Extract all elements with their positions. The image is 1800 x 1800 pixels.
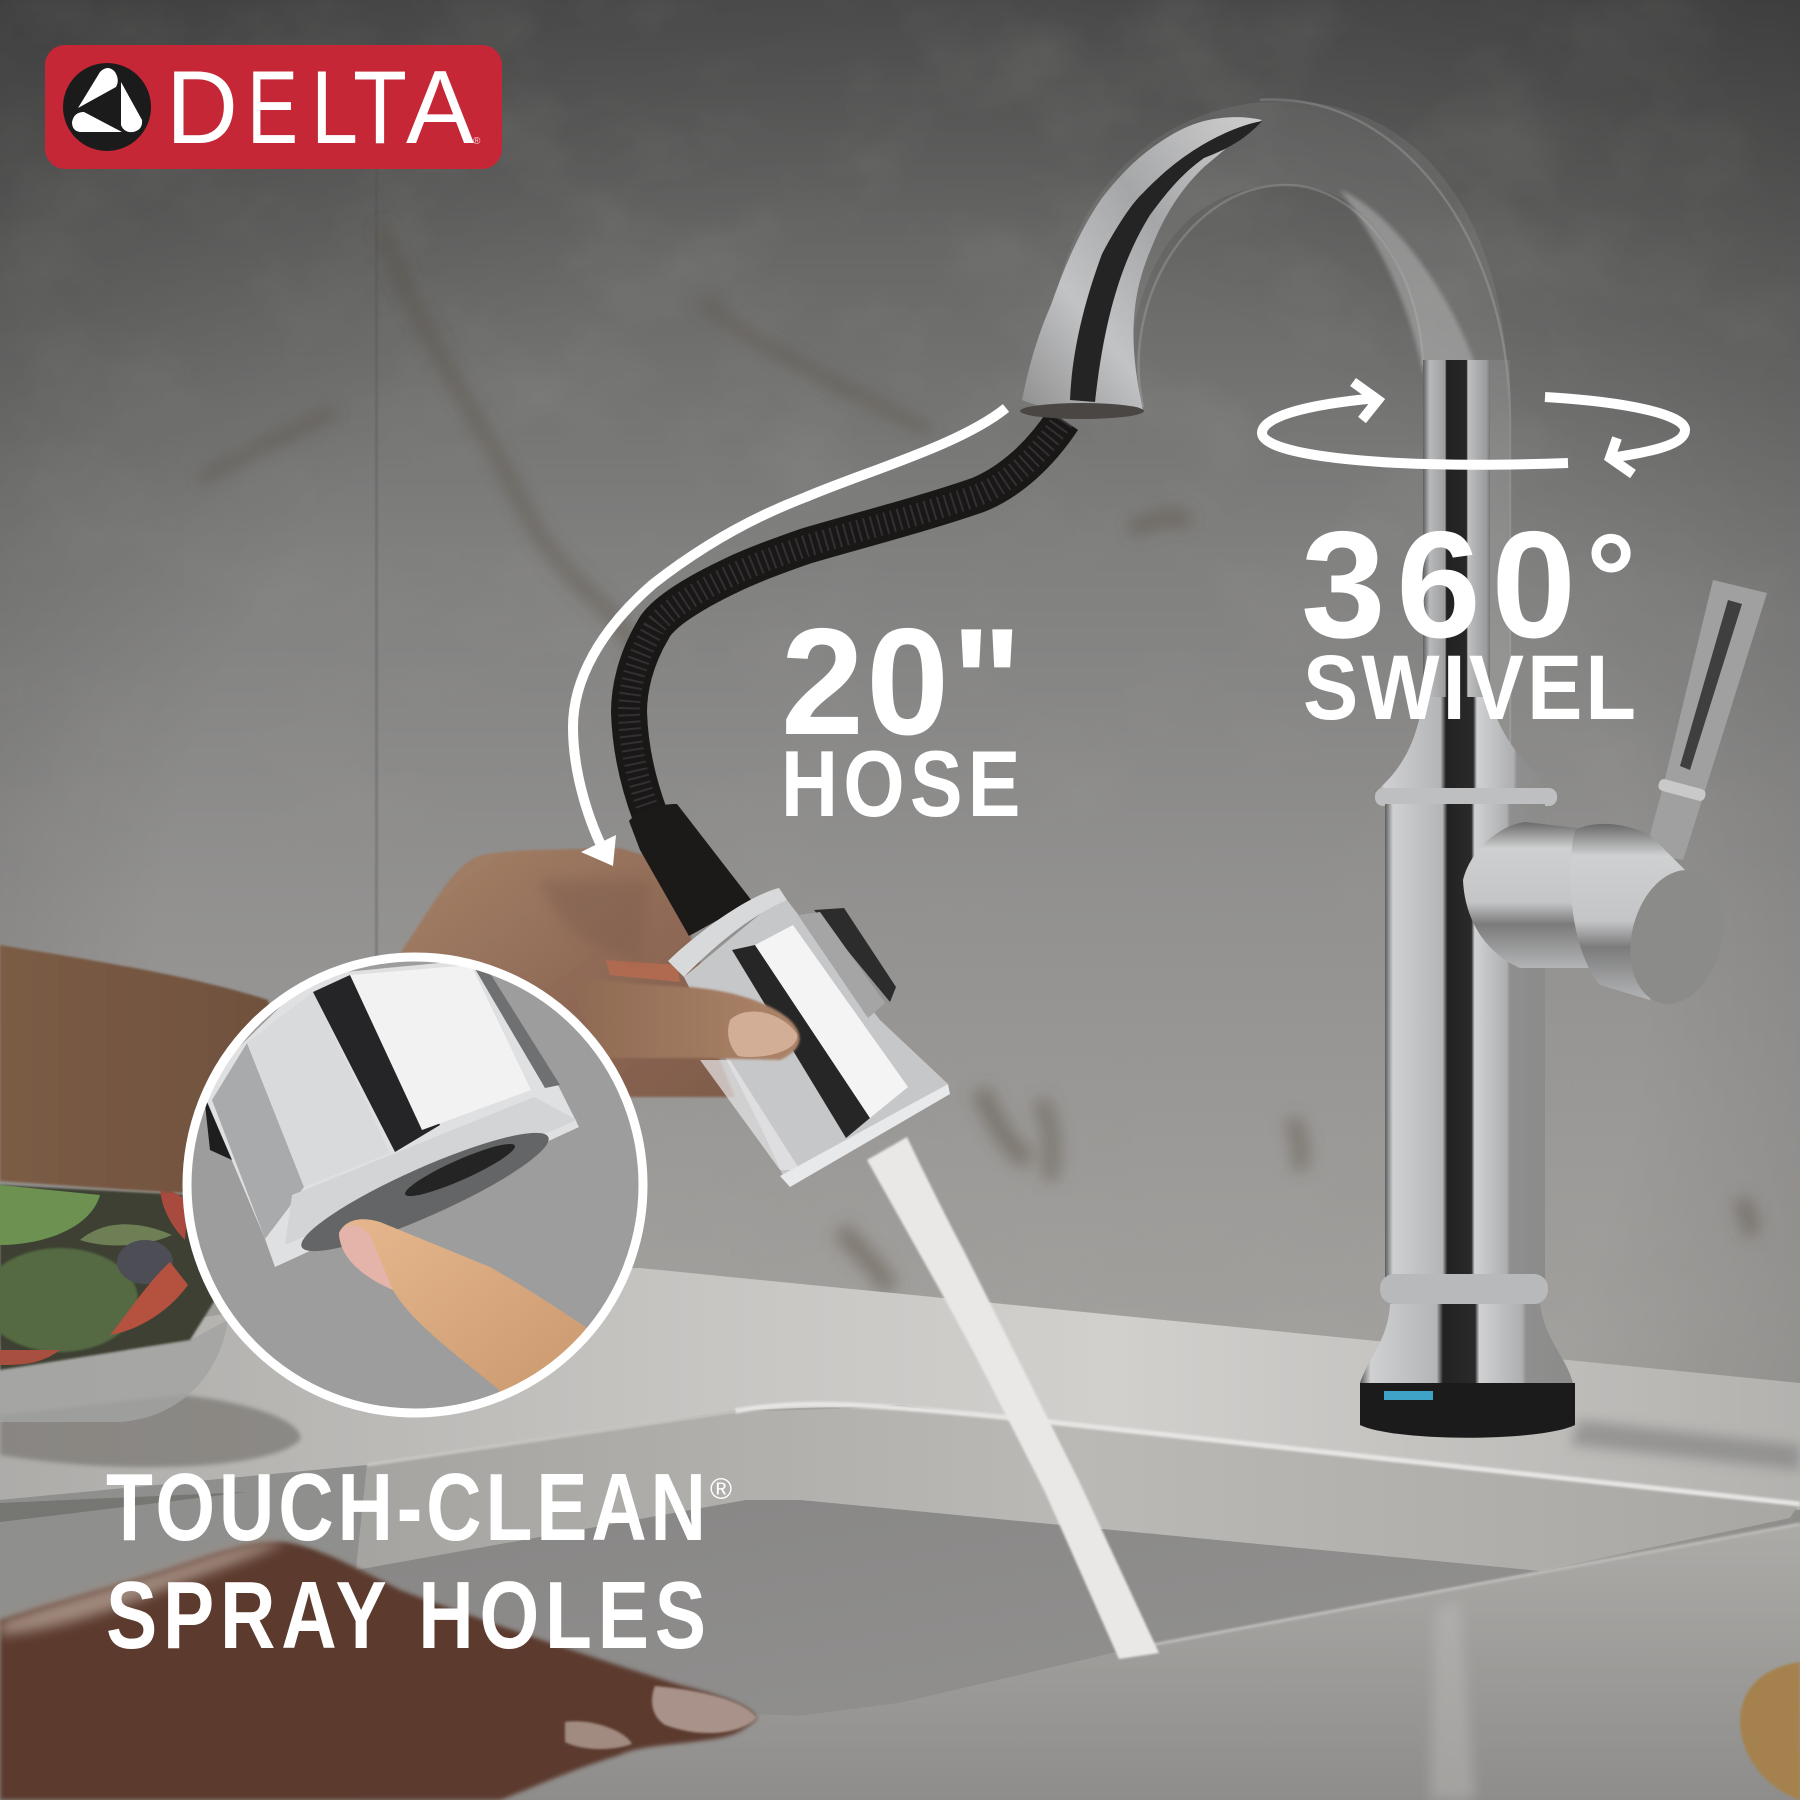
neck translucent edge (1490, 360, 1510, 700)
panel: touch-clean spray holes close-up (187, 957, 643, 1420)
logo: Delta (45, 45, 502, 169)
spout chrome (1022, 117, 1262, 413)
water stream (867, 1137, 1159, 1659)
arrow: hose length (573, 408, 1006, 866)
label: touch-clean spray holes: ® (710, 1473, 732, 1506)
handle cylinder left (1463, 822, 1595, 968)
wordmark: A (406, 50, 475, 166)
hand behind spray head (400, 848, 735, 1100)
registered mark: ® (473, 136, 481, 147)
shoulder reflection (1340, 190, 1478, 372)
hose (629, 420, 1063, 815)
spray face with holes (301, 1132, 549, 1252)
circle outline (187, 957, 643, 1413)
translucent swivel ghost of spout (1085, 143, 1466, 790)
handle cylinder right (1570, 824, 1690, 1000)
label: 360 degree swivel: ° (1586, 509, 1636, 648)
lever ring (1657, 778, 1707, 802)
wordmark (166, 50, 475, 166)
spout outlet (1020, 403, 1144, 419)
arrow: 360 swivel rotation (1262, 382, 1685, 474)
icon: orange dish at lower right (1740, 1662, 1800, 1800)
neck tube (1423, 360, 1490, 790)
countertop and sink (0, 1268, 1800, 1800)
wordmark: T (353, 50, 407, 166)
label: touch-clean spray holes: SPRAY HOLES (106, 1562, 706, 1669)
touch base (1360, 1383, 1575, 1438)
logo mark (63, 63, 151, 151)
handle disc (1617, 860, 1737, 1014)
hose connector (629, 804, 752, 936)
salad bowl (0, 1185, 300, 1467)
fingernail (339, 1225, 393, 1290)
spout dark reflection (1070, 121, 1262, 402)
handle lever (1645, 580, 1767, 860)
label: 20 inch hose: 20" (781, 597, 1022, 766)
faucet (1020, 100, 1767, 1438)
top collar (1375, 788, 1557, 806)
blue LED (1384, 1391, 1433, 1400)
thumb over spray head (574, 975, 800, 1060)
wordmark: E (247, 50, 298, 166)
finger pressing (339, 1219, 587, 1392)
spray face centre (405, 1144, 515, 1196)
lower collar (1380, 1274, 1548, 1304)
logo background (45, 45, 502, 169)
label: 360 degree swivel: 360 (1301, 500, 1576, 670)
wordmark: D (166, 50, 238, 166)
label: touch-clean spray holes (106, 1454, 732, 1669)
wordmark: L (311, 50, 358, 166)
lever reflections (1680, 600, 1742, 770)
forearm (0, 945, 300, 1193)
spray head (668, 888, 950, 1187)
lower hand (0, 1542, 757, 1800)
label: touch-clean spray holes: TOUCH-CLEAN (106, 1454, 706, 1561)
ghost outline (1139, 100, 1510, 790)
lower base (1360, 1304, 1573, 1383)
label: 20 inch hose: HOSE (781, 732, 1020, 837)
label: 360 degree swivel: SWIVEL (1303, 636, 1636, 739)
base flare (1375, 697, 1557, 792)
magnified spray head (200, 960, 590, 1420)
label: 360 degree swivel (1301, 500, 1636, 739)
main body (1385, 804, 1545, 1279)
